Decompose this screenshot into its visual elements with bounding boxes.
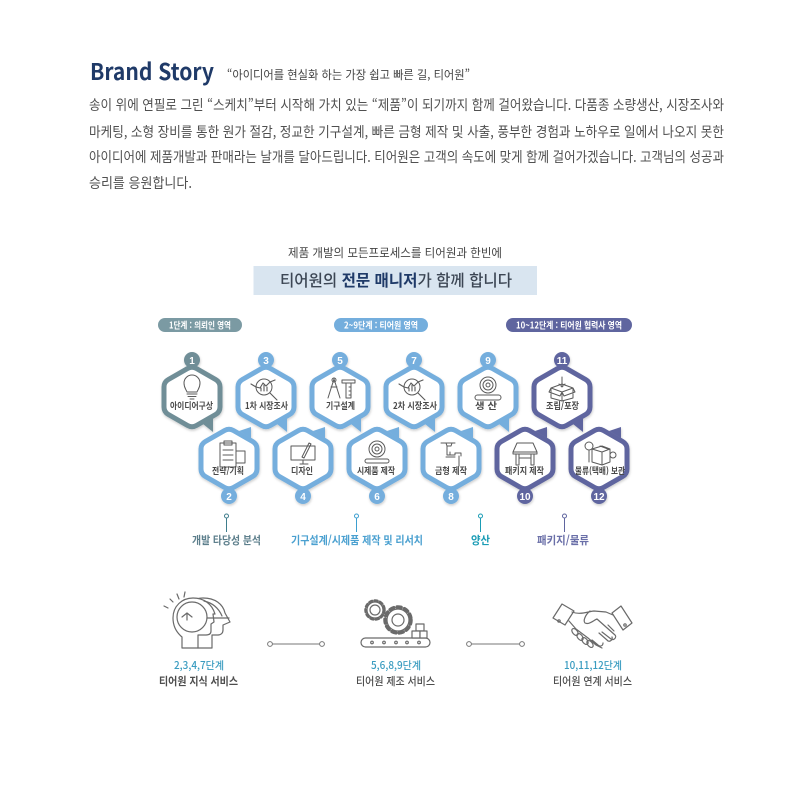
hexagon 6: prototype: 6 [374,492,380,503]
hexagon 11: assembly: 11 [557,356,568,367]
hexagon 2: strategy [201,427,257,504]
hexagon 3: market research 1 [238,352,294,432]
hexagon 5: mechanical design: 기구설계 [326,399,355,412]
hexagon 10: package production: 10 [519,492,531,503]
pill: stage 2-9: 2~9단계 : 티어원 영역 [344,318,418,332]
category: feasibility analysis: 개발 타당성 분석 [192,532,261,548]
hexagon 9: production: 9 [485,356,491,367]
hexagon 4: design: 4 [300,492,306,503]
hexagon 8: mold [423,427,479,504]
hexagon 1: idea: 아이디어구상 [170,399,214,412]
hexagon 11: assembly [534,352,590,432]
banner: expert manager [254,266,537,295]
subheading tagline: “아이디어를 현실화 하는 가장 쉽고 빠른 길, 티어원” [227,66,470,83]
category: mass production [471,514,490,548]
hexagon 10: package production: 패키지 제작 [505,464,545,477]
hexagon 4: design [275,427,331,504]
hexagon 7: market research 2 [386,352,442,432]
category: package and logistics: 패키지/물류 [537,532,589,548]
hexagon 7: market research 2: 7 [411,356,417,367]
service: manufacturing: 5,6,8,9단계 [371,658,421,673]
text block: brand story body: 승리를 응원합니다. [89,173,192,193]
service: manufacturing [356,658,435,689]
hexagon 9: production [460,352,516,432]
hexagon 2: strategy: 전략/기획 [212,464,244,477]
hexagon 1: idea: 1 [189,356,195,367]
hexagon 2: strategy: 2 [226,492,232,503]
icon: handshake [553,604,632,649]
hexagon 8: mold: 8 [448,492,454,503]
hexagon 3: market research 1: 3 [263,356,269,367]
banner: expert manager: 티어원의 전문 매니저가 함께 합니다 [280,267,512,291]
hexagon 10: package production [497,427,553,504]
section intro text: 제품 개발의 모든프로세스를 티어원과 한빈에 [288,244,502,261]
hexagon 5: mechanical design: 5 [337,356,343,367]
hexagon 6: prototype: 시제품 제작 [357,464,396,477]
service: linkage: 10,11,12단계 [564,658,622,673]
hexagon 6: prototype [349,427,405,504]
heading: Brand Story: Brand Story [90,53,214,87]
connector 2 [467,642,524,646]
icon: gears and conveyor [361,600,430,647]
service: knowledge: 2,3,4,7단계 [174,658,224,673]
hexagon 3: market research 1: 1차 시장조사 [245,399,289,412]
service: knowledge: 티어원 지식 서비스 [159,673,238,689]
connector 1 [268,642,324,646]
hexagon 7: market research 2: 2차 시장조사 [393,399,438,412]
hexagon 12: logistics: 물류(택배) 보관 [575,464,626,477]
hexagon 12: logistics [571,427,627,504]
hexagon 12: logistics: 12 [593,492,605,503]
category: design, prototype and research [291,514,423,548]
hexagon 9: production: 생 산 [475,399,498,412]
service: manufacturing: 티어원 제조 서비스 [356,673,435,689]
category: design, prototype and research: 기구설계/시제품 제작 및 리서치 [291,532,423,548]
service: knowledge [159,658,238,689]
hexagon 4: design: 디자인 [291,464,313,477]
text block: brand story body: 마케팅, 소형 장비를 통한 원가 절감, 정교한 기구설계, 빠른 금형 제작 및 사출, 풍부한 경험과 노하우로 일에서 나오지 못한 [89,122,724,142]
hexagon 8: mold: 금형 제작 [435,464,468,477]
icon: heads with clock [164,592,230,648]
text block: brand story body: 송이 위에 연필로 그린 “스케치”부터 시작해 가치 있는 “제품”이 되기까지 함께 걸어왔습니다. 다품종 소량생산, 시장조사와 [89,95,724,115]
hexagon 1: idea [164,352,220,432]
category: mass production: 양산 [471,532,490,548]
text block: brand story body: 아이디어에 제품개발과 판매라는 날개를 달아드립니다. 티어원은 고객의 속도에 맞게 함께 걸어가겠습니다. 고객님의 성공과 [89,147,724,167]
service: linkage: 티어원 연계 서비스 [553,673,632,689]
category: package and logistics [537,514,589,548]
category: feasibility analysis [192,514,261,548]
pill: stage 10-12: 10~12단계 : 티어원 협력사 영역 [516,318,622,332]
pill: stage 1: 1단계 : 의뢰인 영역 [169,318,231,332]
service: linkage [553,658,632,689]
hexagon 5: mechanical design [312,352,368,432]
hexagon 11: assembly: 조립/포장 [546,399,580,412]
text block: brand story body [89,95,724,193]
